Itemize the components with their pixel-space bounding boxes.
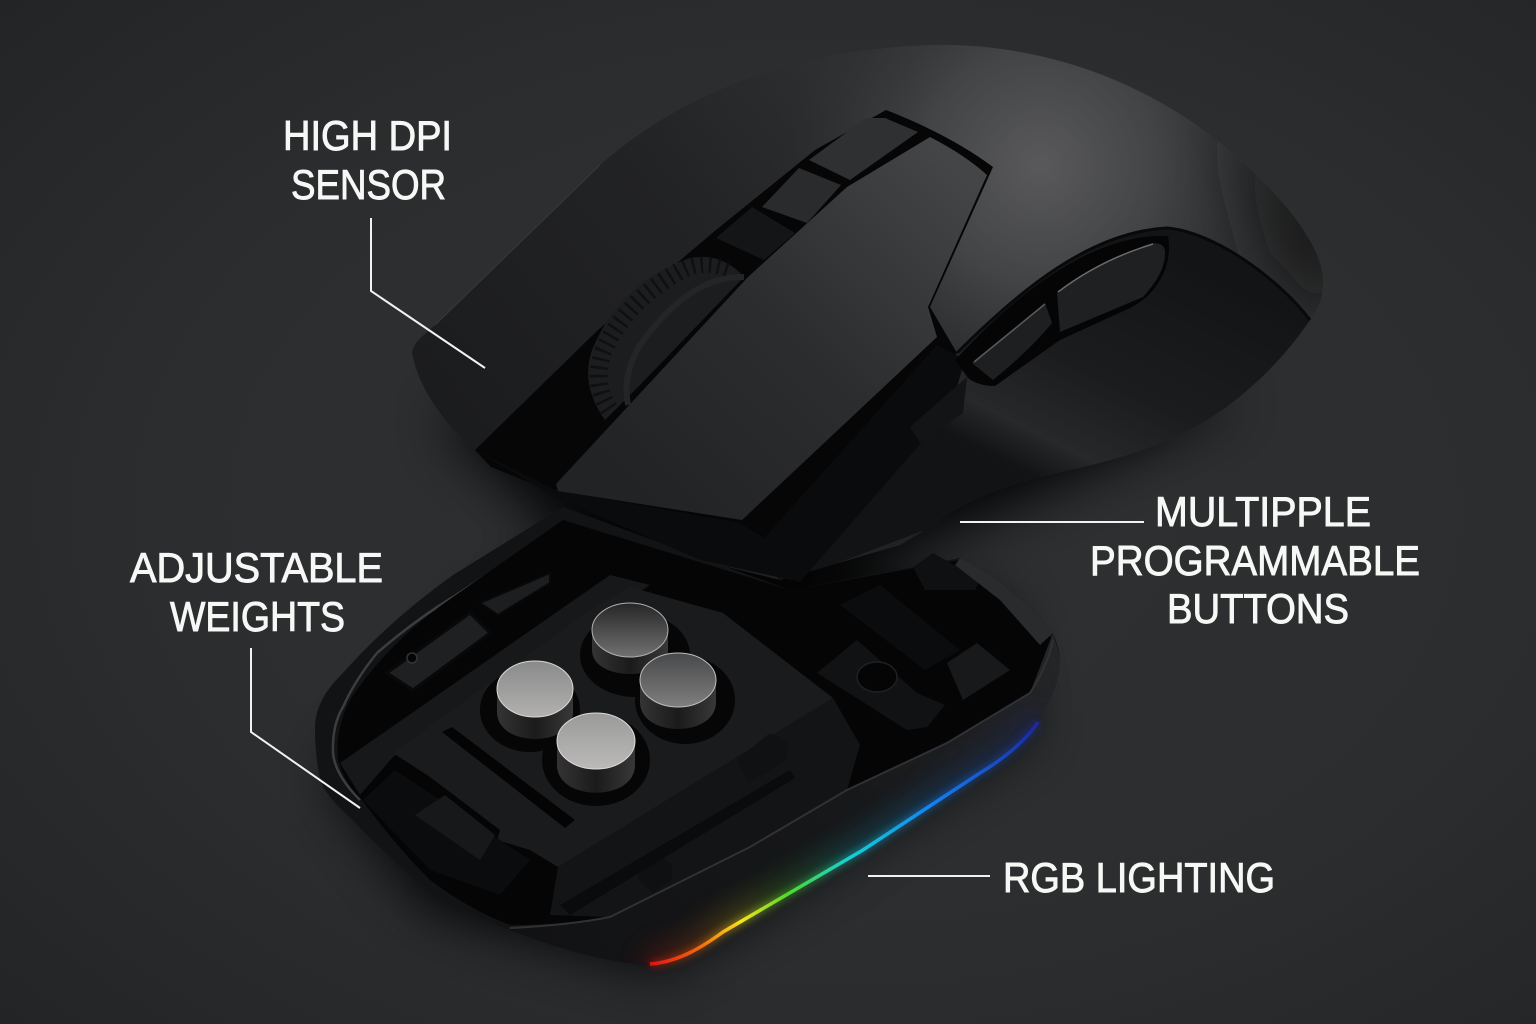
adjustable weights xyxy=(480,603,735,806)
rim highlight xyxy=(333,540,540,800)
side recess xyxy=(955,236,1169,386)
large side button xyxy=(1057,243,1165,332)
plate slot xyxy=(442,727,575,828)
weight 2 xyxy=(640,653,716,729)
mouse base (lower shell) xyxy=(315,507,1080,980)
weight 3 xyxy=(497,661,573,739)
base interior floor xyxy=(338,520,1053,925)
base outer shell xyxy=(315,507,1060,965)
hole plate xyxy=(817,640,945,730)
callout: high DPI sensor: HIGH DPI xyxy=(283,112,452,159)
button recess xyxy=(475,110,993,540)
weight bay plate xyxy=(393,587,833,867)
callout: adjustable weights: ADJUSTABLE xyxy=(130,544,383,591)
callout: high DPI sensor: SENSOR xyxy=(291,161,446,208)
small block on ledge xyxy=(638,853,672,893)
DPI button lower xyxy=(762,168,841,223)
side programmable buttons xyxy=(910,236,1169,443)
front dark face xyxy=(475,345,965,582)
bottom-left parts xyxy=(363,770,530,895)
right block xyxy=(947,643,1010,700)
mouse top shell xyxy=(412,45,1323,580)
weight 1 xyxy=(592,603,668,674)
floor left band xyxy=(340,575,650,795)
wall top right piece xyxy=(955,558,1053,645)
left slab xyxy=(480,573,550,615)
callout: adjustable weights: WEIGHTS xyxy=(170,593,345,640)
callout: multiple programmable buttons: BUTTONS xyxy=(1167,585,1349,632)
floor lower band xyxy=(550,698,860,917)
left shell edge highlight xyxy=(435,165,600,325)
rgb light strip xyxy=(650,722,1038,964)
small side button xyxy=(972,303,1052,380)
side wall xyxy=(635,634,1060,965)
lower side body xyxy=(764,228,1310,585)
lower side button xyxy=(910,377,967,443)
infographic: exploded gaming mouse xyxy=(130,45,1419,982)
callout: multiple programmable buttons: MULTIPPLE xyxy=(1155,488,1371,535)
scroll wheel xyxy=(588,257,744,420)
callout: RGB lighting: RGB LIGHTING xyxy=(1003,854,1275,901)
callout: adjustable weights xyxy=(130,544,383,808)
ledge trough xyxy=(560,770,795,915)
inner parts xyxy=(840,585,960,670)
shadows xyxy=(330,300,1240,970)
screw hole xyxy=(857,662,897,692)
weight 4 xyxy=(557,713,635,793)
left block xyxy=(387,613,490,690)
DPI button top xyxy=(809,118,918,180)
right shell darkening xyxy=(1217,163,1323,308)
main left button xyxy=(556,137,987,520)
top-right block xyxy=(913,553,980,590)
shell highlight xyxy=(876,45,1210,334)
side groove xyxy=(957,228,1310,353)
third button xyxy=(716,207,795,260)
top shell body xyxy=(412,45,1323,580)
weight recesses xyxy=(480,613,735,806)
callout: multiple programmable buttons xyxy=(960,488,1420,632)
callout: high DPI sensor xyxy=(283,112,485,368)
callout: multiple programmable buttons: PROGRAMMABLE xyxy=(1090,537,1420,584)
ledge slab xyxy=(737,733,788,783)
wall upper edge xyxy=(510,640,1053,928)
